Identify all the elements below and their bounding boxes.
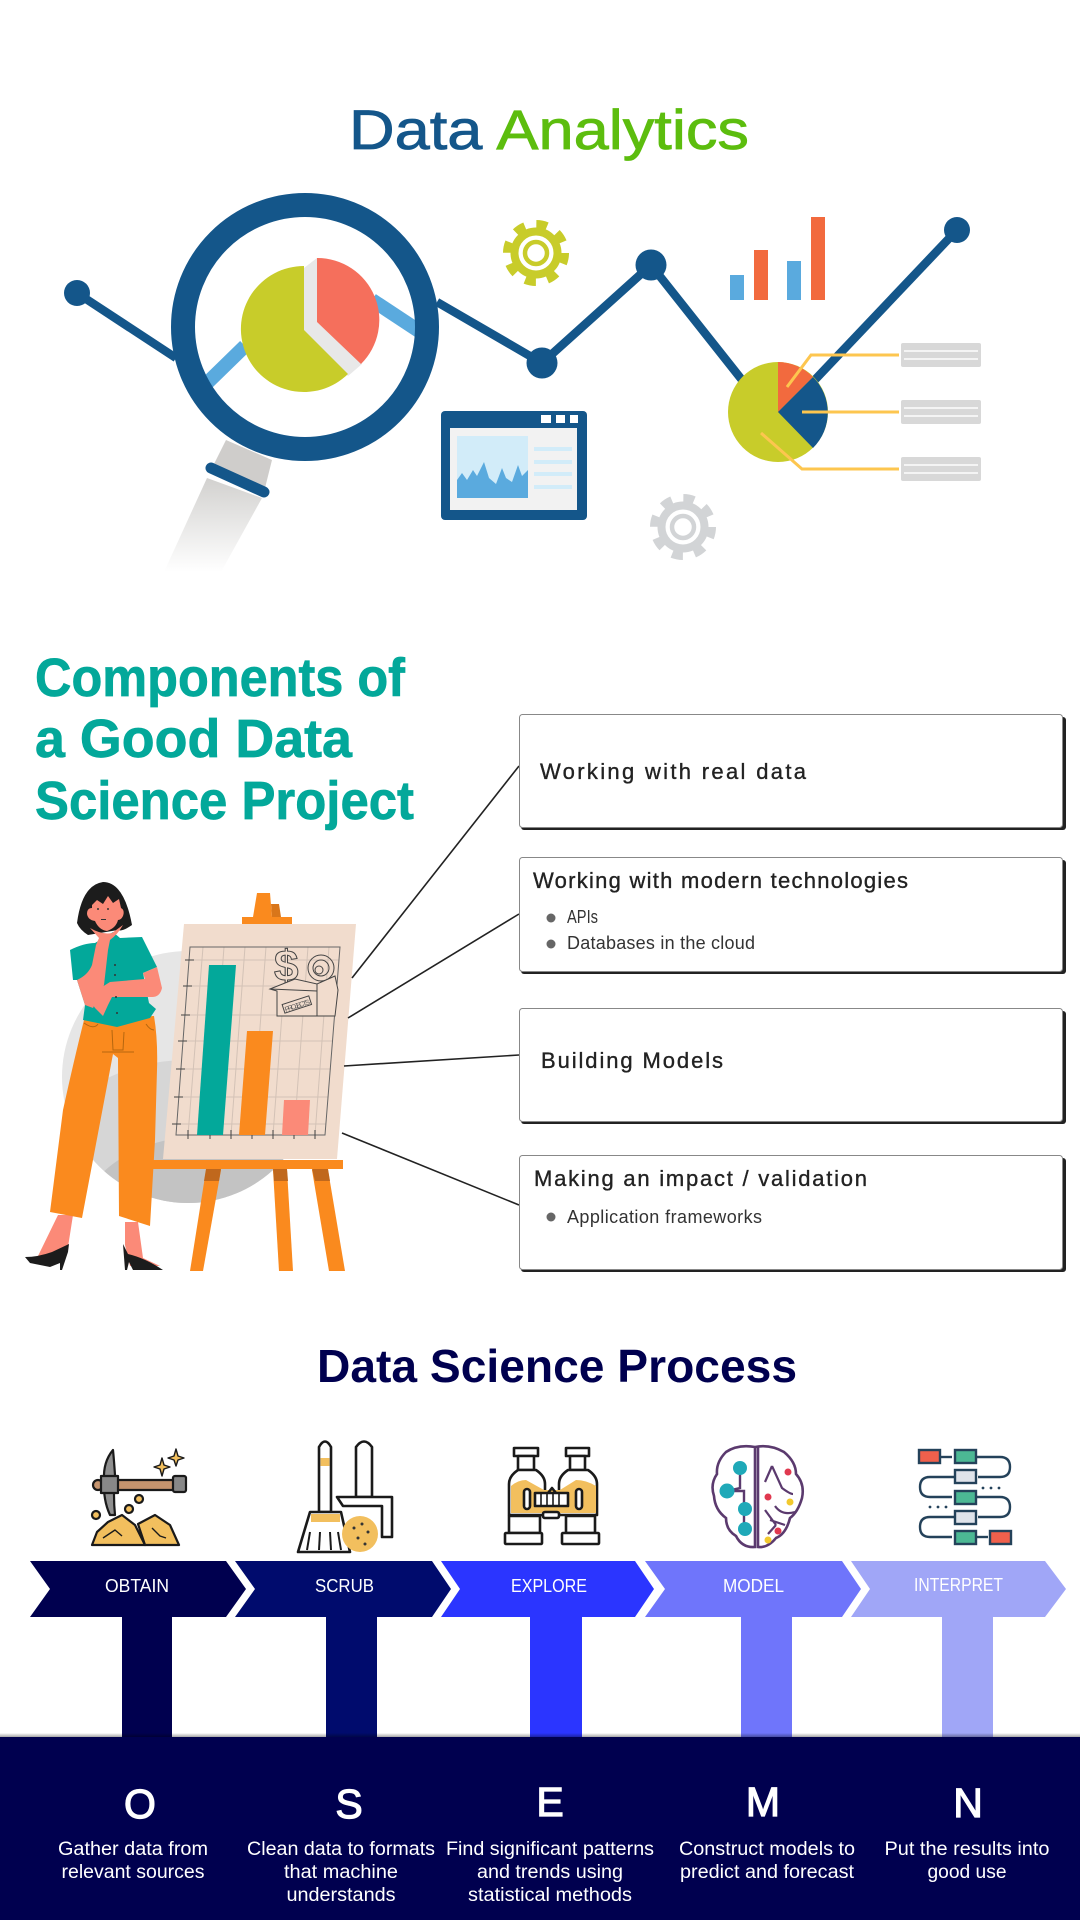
icon: dashboard window [441, 411, 587, 520]
chevron: MODEL: MODEL [723, 1576, 784, 1596]
process stems [122, 1617, 993, 1739]
title: Data Analytics: Data Analytics [349, 98, 749, 161]
panel: Working with modern technologies: Working with modern technologies [533, 868, 908, 893]
chevron: EXPLORE [441, 1561, 654, 1617]
panel: Building Models [520, 1008, 1066, 1124]
chevron: INTERPRET: INTERPRET [914, 1575, 1003, 1595]
woman figure [25, 882, 163, 1270]
panel: process descriptions [0, 1733, 1080, 1920]
chevron: OBTAIN: OBTAIN [105, 1576, 169, 1596]
panel: Working with modern technologies: APIs [567, 907, 598, 927]
column: E: statistical methods [468, 1885, 632, 1906]
column: S: S [335, 1781, 363, 1827]
heading: Components of a Good Data Science Project: Components of [35, 648, 406, 708]
chevron: EXPLORE: EXPLORE [511, 1576, 587, 1596]
column: O [58, 1781, 208, 1883]
column: O: Gather data from [58, 1839, 208, 1860]
chevron: MODEL [645, 1561, 861, 1617]
connector lines [342, 766, 519, 1205]
sketch: project box: PROJECTS [284, 999, 311, 1014]
column: S: understands [286, 1885, 396, 1906]
sketch: project box: $ [274, 942, 298, 991]
icon: magnifier lens with pie [183, 205, 427, 449]
panel: Building Models: Building Models [541, 1048, 723, 1073]
column: E: E [536, 1779, 564, 1825]
heading: Components of a Good Data Science Project: Science Project [35, 771, 414, 831]
chart bars [197, 965, 310, 1135]
icon: magnifier handle [164, 440, 272, 572]
icon: grey gear [654, 498, 712, 556]
column: O: relevant sources [62, 1862, 204, 1883]
column: E: and trends using [477, 1862, 623, 1883]
background circle [62, 951, 284, 1203]
heading: Data Science Process: Data Science Process [317, 1340, 797, 1392]
panel: Working with modern technologies [520, 858, 1066, 974]
heading: Components of a Good Data Science Project: a Good Data [35, 709, 353, 769]
icon: binoculars [505, 1448, 599, 1544]
chevron: SCRUB: SCRUB [315, 1576, 374, 1596]
column: S: that machine [284, 1862, 398, 1883]
panel: Working with modern technologies: Databases in the cloud [567, 933, 755, 953]
illustration: analytics hero [64, 205, 981, 572]
icon: pickaxe and gold [92, 1449, 186, 1545]
column: E: Find significant patterns [446, 1839, 654, 1860]
bar chart: mini bars [730, 217, 825, 300]
column: N: good use [928, 1862, 1006, 1883]
column: S: Clean data to formats [247, 1839, 435, 1860]
column: N: Put the results into [884, 1839, 1050, 1860]
panel: Making an impact / validation [520, 1156, 1066, 1272]
column: N: N [953, 1780, 983, 1826]
easel [153, 893, 345, 1271]
icon: olive gear [507, 224, 565, 282]
column: M [679, 1779, 855, 1883]
heading: Components of a Good Data Science Project [35, 648, 414, 831]
trend line [64, 217, 970, 385]
chevron: OBTAIN [30, 1561, 246, 1617]
column: N [884, 1780, 1050, 1883]
icon: flowchart [919, 1450, 1011, 1544]
chevron: SCRUB [235, 1561, 451, 1617]
column: O: O [124, 1781, 156, 1827]
sketch: project box [270, 942, 338, 1016]
panel: Working with real data [520, 714, 1066, 830]
chart grid [172, 947, 340, 1139]
column: S [247, 1781, 435, 1906]
panel: Making an impact / validation: Application frameworks [567, 1207, 762, 1227]
panel: Working with real data: Working with real data [540, 759, 807, 784]
pie chart with callouts [728, 343, 981, 481]
icon: broom and dustpan [298, 1442, 392, 1552]
column: M: M [746, 1779, 780, 1825]
board [163, 924, 356, 1159]
panel: Making an impact / validation: Making an impact / validation [534, 1166, 867, 1191]
icon: brain [713, 1446, 803, 1547]
column: M: Construct models to [679, 1839, 855, 1860]
illustration: woman presenting easel chart [25, 882, 356, 1308]
column: E [446, 1779, 654, 1906]
column: M: predict and forecast [680, 1862, 855, 1883]
chevron: INTERPRET [851, 1561, 1066, 1617]
